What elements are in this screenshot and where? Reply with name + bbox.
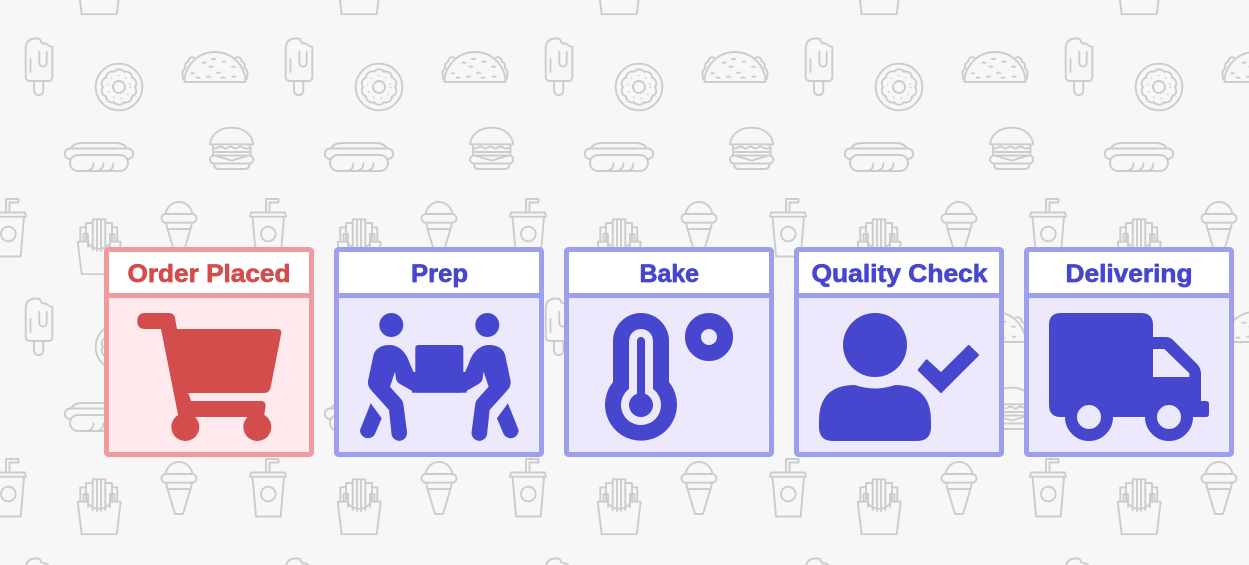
panel: Order Placed [106, 250, 312, 454]
icon: delivery truck [1049, 313, 1209, 435]
panel: Bake [566, 250, 772, 454]
heading: Order Placed: Order Placed [128, 260, 290, 288]
panel: Quality Check [796, 250, 1002, 454]
heading: Bake: Bake [640, 260, 699, 288]
heading: Quality Check: Quality Check [812, 260, 988, 288]
panel: Delivering [1026, 250, 1232, 454]
heading: Prep: Prep [411, 260, 468, 288]
icon: thermometer and degree sign [605, 313, 725, 441]
icon: shopping cart [137, 313, 281, 441]
heading: Delivering: Delivering [1066, 260, 1192, 288]
icon: person with check mark [819, 313, 978, 441]
panel: Prep [336, 250, 542, 454]
icon: two people carrying a box [360, 313, 519, 441]
